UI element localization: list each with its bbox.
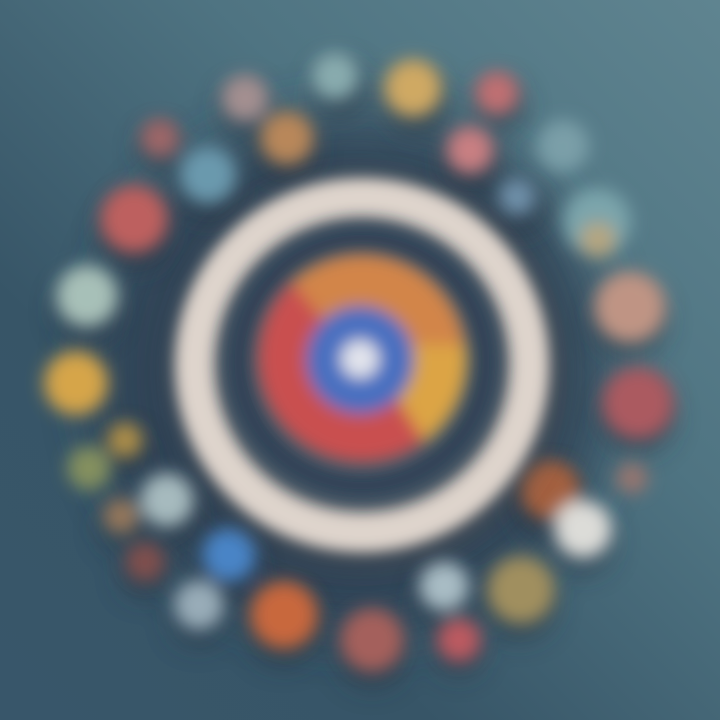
icon: pink: [446, 126, 494, 174]
icon: pale green left: [56, 265, 118, 327]
icon: salmon top right: [475, 71, 519, 115]
icon: orange bottom: [250, 581, 318, 649]
icon: mauve top: [221, 74, 269, 122]
icon: blue upper left: [179, 146, 237, 204]
disc: orange top segment: [292, 255, 466, 358]
icon: olive: [67, 446, 111, 490]
icon: red right: [602, 367, 674, 439]
icon: pale blue upper right: [537, 120, 589, 172]
central ring: [194, 197, 530, 533]
disc: yellow right segment: [395, 345, 467, 442]
icon: rose small: [140, 118, 180, 158]
icon: pale blue bottom left: [174, 580, 224, 630]
icon: orange tan top: [260, 111, 314, 165]
ring brown shadow: [176, 180, 556, 560]
icon: brown orange: [520, 460, 580, 520]
disc: white center: [341, 340, 379, 378]
icon: small tan: [616, 462, 648, 494]
center target: [258, 254, 467, 462]
icon: tan: [103, 498, 139, 534]
icon: dark red: [125, 542, 165, 582]
icon: red brown bottom: [340, 608, 404, 672]
ring inner dark shade: [238, 238, 486, 486]
disc: blue circle: [306, 306, 414, 414]
icon: blue small: [498, 178, 536, 216]
icon: white: [554, 500, 612, 558]
icon: red bottom: [437, 618, 481, 662]
icon: red upper left: [100, 185, 168, 253]
icon: pale teal top: [311, 52, 359, 100]
disc: red base: [258, 254, 466, 462]
outer icons: [44, 52, 674, 672]
icon: pale left: [140, 473, 194, 527]
icon: salmon right: [594, 271, 666, 343]
icon: pale bottom: [419, 561, 469, 611]
icon: blue bottom left: [202, 528, 256, 582]
icon: yellow badge top: [384, 59, 442, 117]
icon: small yellow: [107, 422, 143, 458]
icon: yellow left: [44, 351, 108, 415]
dark halo behind icon ring: [97, 117, 607, 627]
icon shadows: [57, 64, 672, 686]
icon: olive gold: [487, 556, 555, 624]
icon: teal and yellow: [563, 188, 631, 258]
